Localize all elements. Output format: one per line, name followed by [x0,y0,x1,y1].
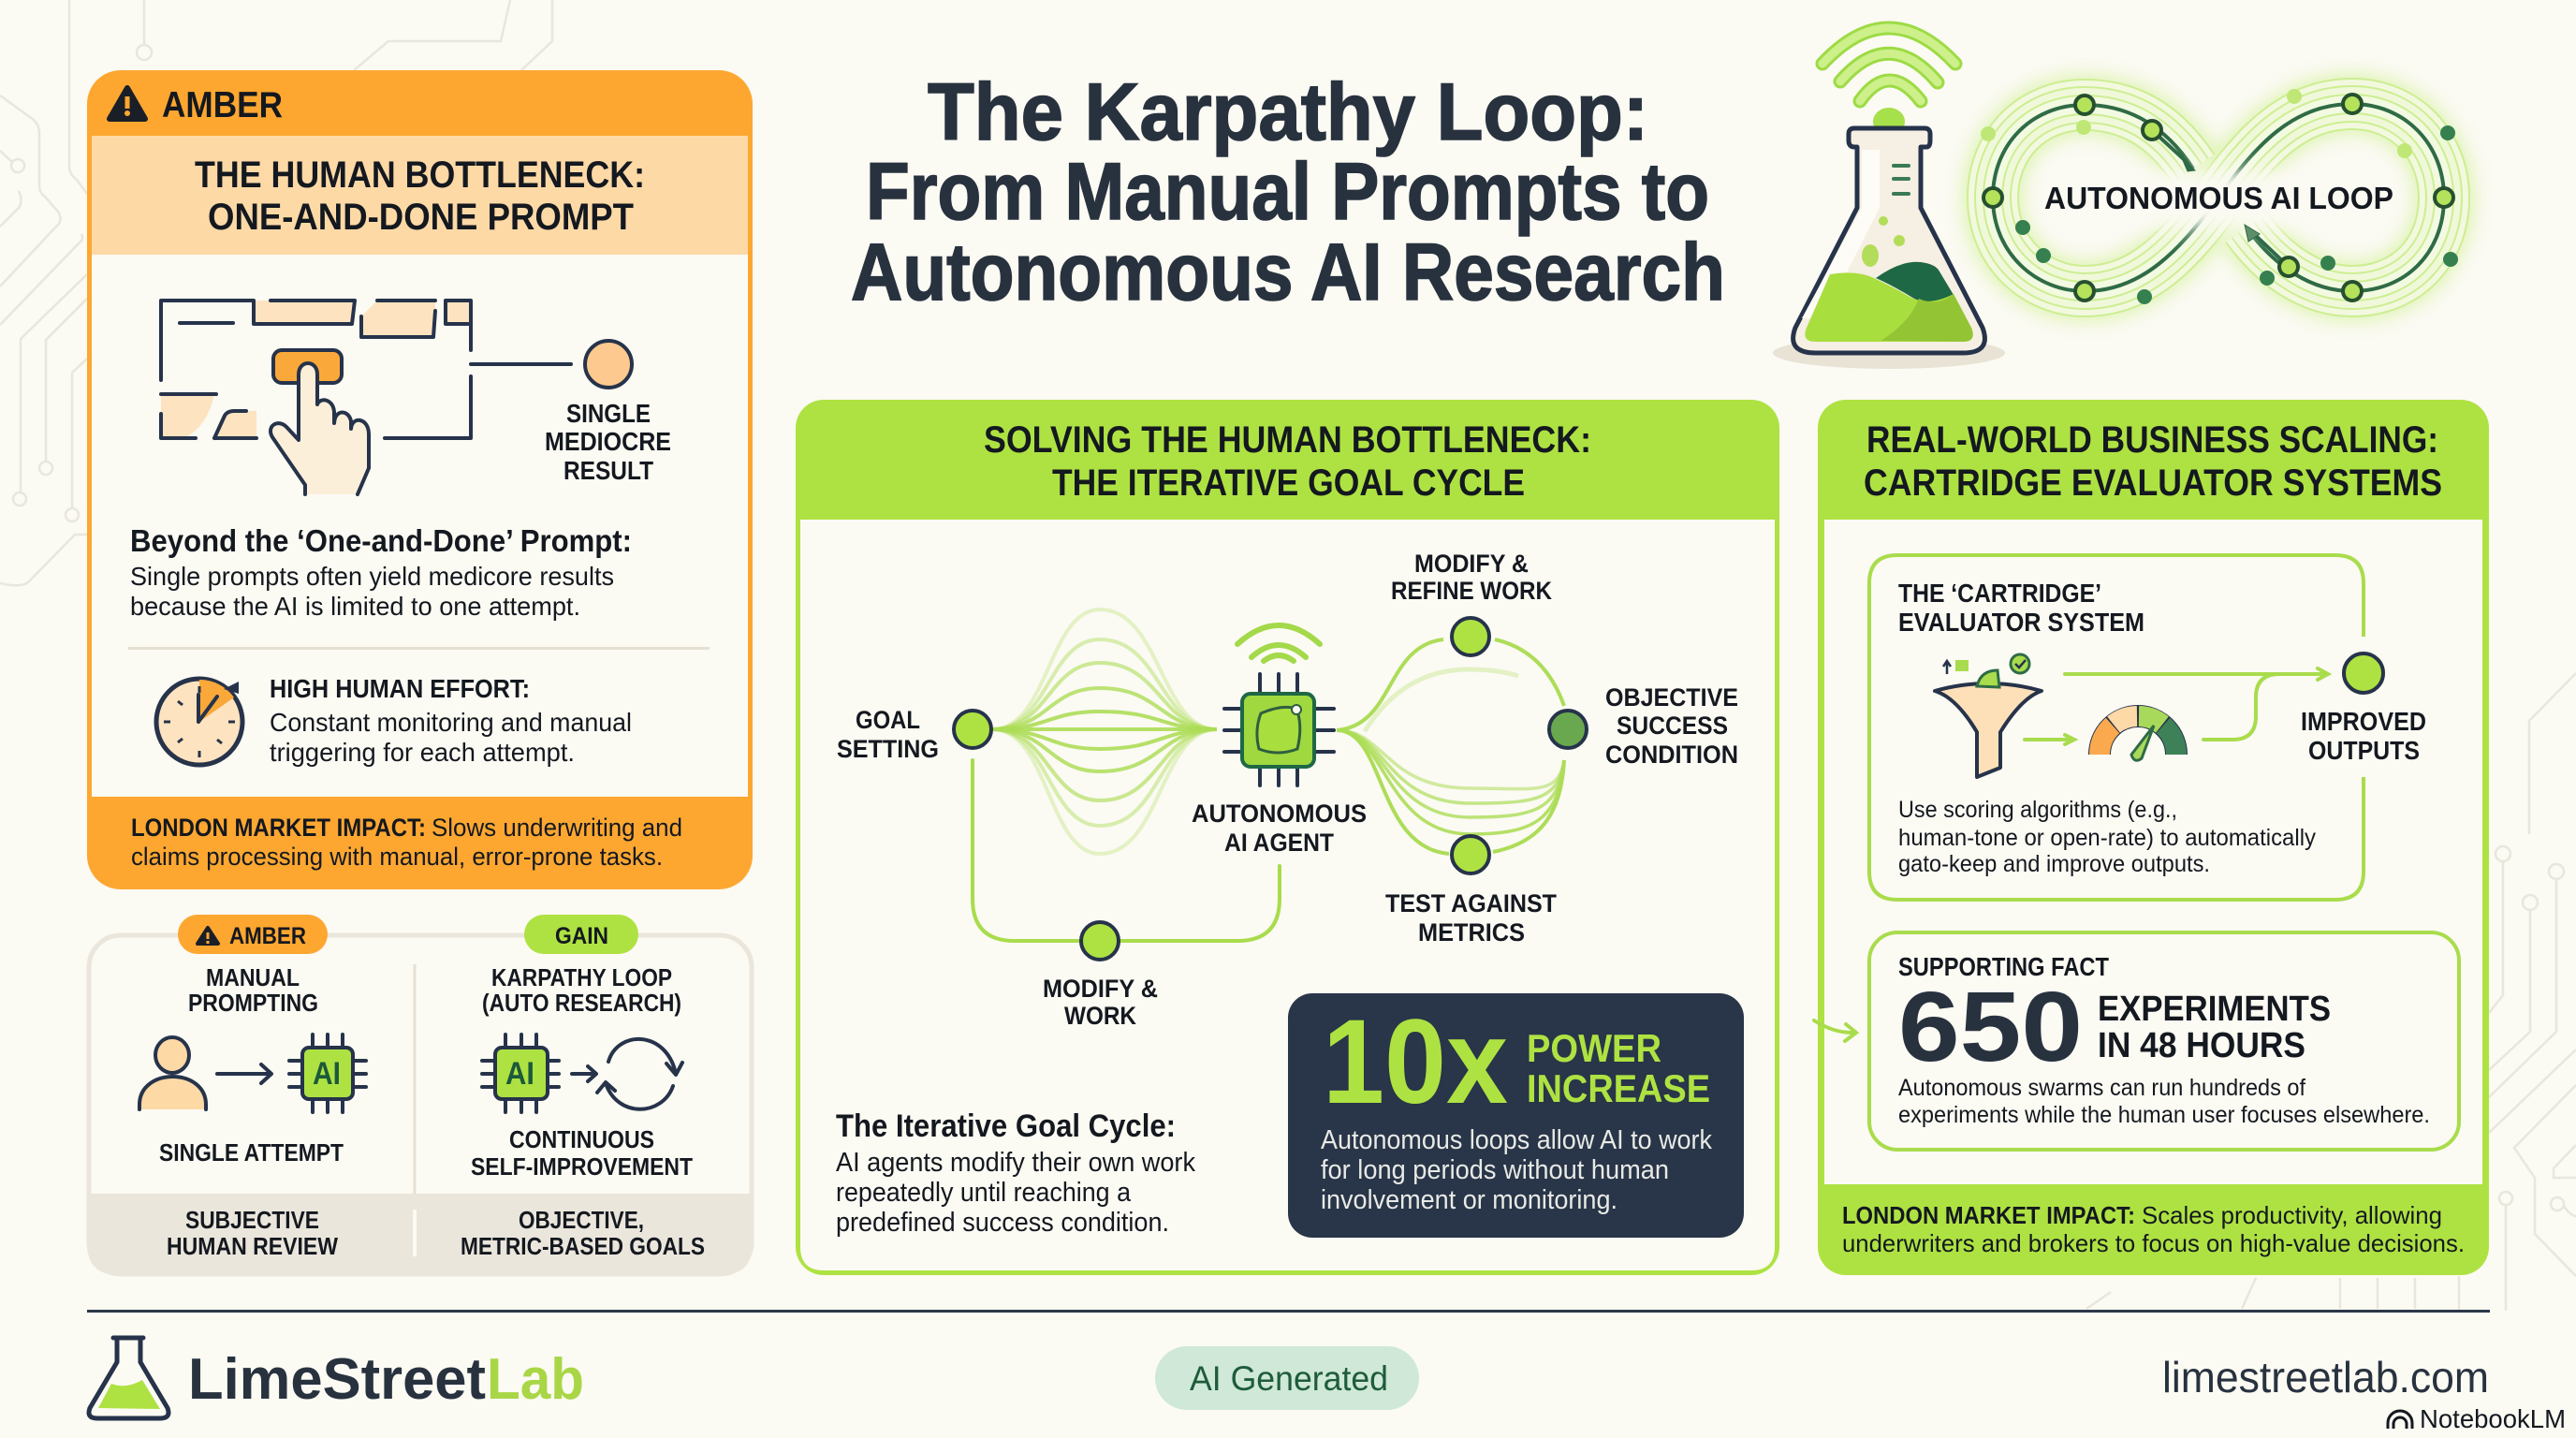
outcome labels: SINGLE ATTEMPT [159,1138,344,1167]
text block: the iterative goal cycle: AI agents modify their own work [836,1148,1195,1178]
card: supporting fact: experiments while the human user focuses elsewhere. [1898,1102,2430,1128]
hero icon: autonomous AI loop [1981,89,2458,304]
text block: the iterative goal cycle: The Iterative Goal Cycle: [836,1108,1176,1144]
text block: the iterative goal cycle: repeatedly until reaching a [836,1178,1132,1208]
outcome labels: CONTINUOUS [509,1125,654,1153]
card heading: EVALUATOR SYSTEM [1898,608,2144,637]
improved outputs label [2301,707,2426,765]
title: The Karpathy Loop: [928,67,1648,157]
callout: london market impact: Scales productivity, allowing [2142,1201,2442,1229]
node labels: TEST AGAINST [1385,889,1557,917]
panel: iterative goal cycle [796,400,1779,1275]
panel: the human bottleneck [87,70,753,889]
panel heading: CARTRIDGE EVALUATOR SYSTEMS [1864,462,2442,504]
badge: gain [524,915,638,954]
flow arrows [2025,668,2328,744]
stat card: 10x power increase: Autonomous loops allow AI to work [1321,1125,1712,1155]
node labels: MODIFY & [1043,975,1158,1003]
card: supporting fact: Autonomous swarms can run hundreds of [1898,1075,2305,1101]
icon: clock [156,679,242,765]
text block: beyond the one-and-done prompt: because the AI is limited to one attempt. [130,592,580,621]
column heading: manual prompting: MANUAL [206,963,300,991]
card: supporting fact [1869,932,2459,1150]
improved outputs label: IMPROVED [2301,707,2426,736]
callout: london market impact: underwriters and brokers to focus on high-value decisions. [1842,1229,2465,1257]
column heading: karpathy loop: KARPATHY LOOP [491,963,672,991]
callout: london market impact [1842,1201,2465,1257]
callout: london market impact: LONDON MARKET IMPACT: [131,814,426,842]
node labels: OBJECTIVE [1605,683,1738,712]
loop-back connector [973,760,1280,941]
description [1898,797,2316,877]
text block: the iterative goal cycle: predefined success condition. [836,1208,1169,1238]
node labels [837,550,1738,1030]
panel heading [1864,419,2442,504]
stat card: 10x power increase: for long periods without human [1321,1155,1669,1185]
title: From Manual Prompts to [866,147,1709,237]
stat card: 10x power increase: involvement or monitoring. [1321,1185,1617,1215]
icon: AI agent chip with signal [1224,625,1334,785]
result label: SINGLE [566,399,651,428]
node labels: CONDITION [1605,741,1738,769]
column heading: karpathy loop [482,963,681,1017]
title [851,67,1725,317]
flow diagram: agent to outcomes [1337,639,1564,854]
node: improved outputs [2344,653,2383,693]
description: Use scoring algorithms (e.g., [1898,797,2177,823]
badge: amber [178,915,328,954]
callout: london market impact [131,814,682,871]
text block: beyond the one-and-done prompt: Beyond the ‘One-and-Done’ Prompt: [130,523,632,558]
text block: high human effort: triggering for each attempt. [270,738,575,767]
icon: AI chip to continuous loop [482,1034,682,1112]
icon: gauge [2100,716,2176,760]
footer logo: LimeStreetLab [89,1338,584,1418]
panel heading [984,419,1591,504]
stat card: 10x power increase: 10x [1323,995,1508,1129]
illustration: single click on a broken interface [161,301,632,494]
nodes [954,618,1587,960]
panel: manual vs loop comparison [87,915,753,1275]
arrows on the loop [2152,130,2289,267]
result label: MEDIOCRE [545,427,671,456]
node labels: AUTONOMOUS [1192,800,1367,828]
review basis labels: OBJECTIVE, [519,1206,644,1234]
result label [545,399,671,485]
hero icon: flask with signal [1773,28,2005,369]
node labels: MODIFY & [1414,550,1529,578]
flow diagram: goal to agent [992,609,1217,854]
card: cartridge evaluator system [1869,555,2426,900]
node labels: GOAL [856,706,920,734]
review basis labels [167,1206,705,1260]
card: supporting fact: 650 [1898,972,2083,1082]
icon: warning triangle [110,88,145,119]
icon: person to AI chip: AI [313,1056,341,1092]
badge: AI generated [1155,1346,1419,1410]
card heading [1898,579,2144,637]
review basis labels: METRIC-BASED GOALS [461,1232,705,1260]
outcome labels: SELF-IMPROVEMENT [471,1152,693,1181]
icon: AI chip to continuous loop: AI [505,1056,534,1092]
text block: high human effort [270,674,632,767]
card: supporting fact: EXPERIMENTS [2098,990,2331,1029]
text block: high human effort: Constant monitoring and manual [270,708,632,737]
panel heading [195,154,645,238]
badge: gain: GAIN [555,923,608,949]
text block: beyond the one-and-done prompt [130,523,632,621]
badge: AI generated: AI Generated [1190,1359,1388,1398]
node labels: SETTING [837,735,939,763]
panel heading: ONE-AND-DONE PROMPT [208,197,634,238]
panel heading: SOLVING THE HUMAN BOTTLENECK: [984,419,1591,461]
footer website: limestreetlab.com [2162,1353,2489,1401]
node labels: AI AGENT [1224,829,1334,857]
panel heading: THE ITERATIVE GOAL CYCLE [1052,462,1525,504]
card: supporting fact: IN 48 HOURS [2098,1026,2305,1065]
stat card: 10x power increase [1288,993,1744,1238]
callout: london market impact: Slows underwriting and [432,814,682,842]
text block: the iterative goal cycle [836,1108,1195,1238]
outcome labels [159,1125,693,1181]
badge: amber: AMBER [229,923,306,949]
card heading: THE ‘CARTRIDGE’ [1898,579,2101,608]
panel heading: THE HUMAN BOTTLENECK: [195,154,645,196]
hero icon: autonomous AI loop: AUTONOMOUS AI LOOP [2044,181,2393,215]
column heading: manual prompting: PROMPTING [188,989,318,1017]
text block: beyond the one-and-done prompt: Single prompts often yield medicore results [130,562,614,591]
footer logo: LimeStreetLab: Lab [487,1347,584,1412]
card: supporting fact: SUPPORTING FACT [1898,952,2109,981]
callout: london market impact: claims processing with manual, error-prone tasks. [131,843,663,871]
column heading: karpathy loop: (AUTO RESEARCH) [482,989,681,1017]
column heading: manual prompting [188,963,318,1017]
title: Autonomous AI Research [851,227,1725,317]
node labels: WORK [1064,1002,1136,1030]
text block: high human effort: HIGH HUMAN EFFORT: [270,674,530,703]
node labels: METRICS [1418,918,1525,946]
result label: RESULT [564,456,653,485]
callout: london market impact: LONDON MARKET IMPACT: [1842,1201,2135,1229]
NotebookLM mark: NotebookLM [2420,1404,2566,1433]
stat card: 10x power increase: INCREASE [1527,1066,1710,1110]
review basis labels: SUBJECTIVE [185,1206,319,1234]
review basis labels: HUMAN REVIEW [167,1232,338,1260]
improved outputs label: OUTPUTS [2308,736,2420,765]
panel: real-world business scaling [1814,400,2489,1275]
icon: funnel [1935,654,2042,777]
panel heading: REAL-WORLD BUSINESS SCALING: [1866,419,2438,461]
arrow into supporting fact [1814,1020,1856,1041]
icon: person to AI chip [139,1034,366,1112]
node labels: REFINE WORK [1391,577,1552,605]
node labels: SUCCESS [1617,712,1728,740]
stat card: 10x power increase: POWER [1527,1026,1661,1070]
description: human-tone or open-rate) to automatically [1898,825,2316,851]
amber status label: AMBER [162,85,283,125]
description: gato-keep and improve outputs. [1898,851,2210,877]
footer logo: LimeStreetLab: LimeStreet [188,1347,486,1412]
